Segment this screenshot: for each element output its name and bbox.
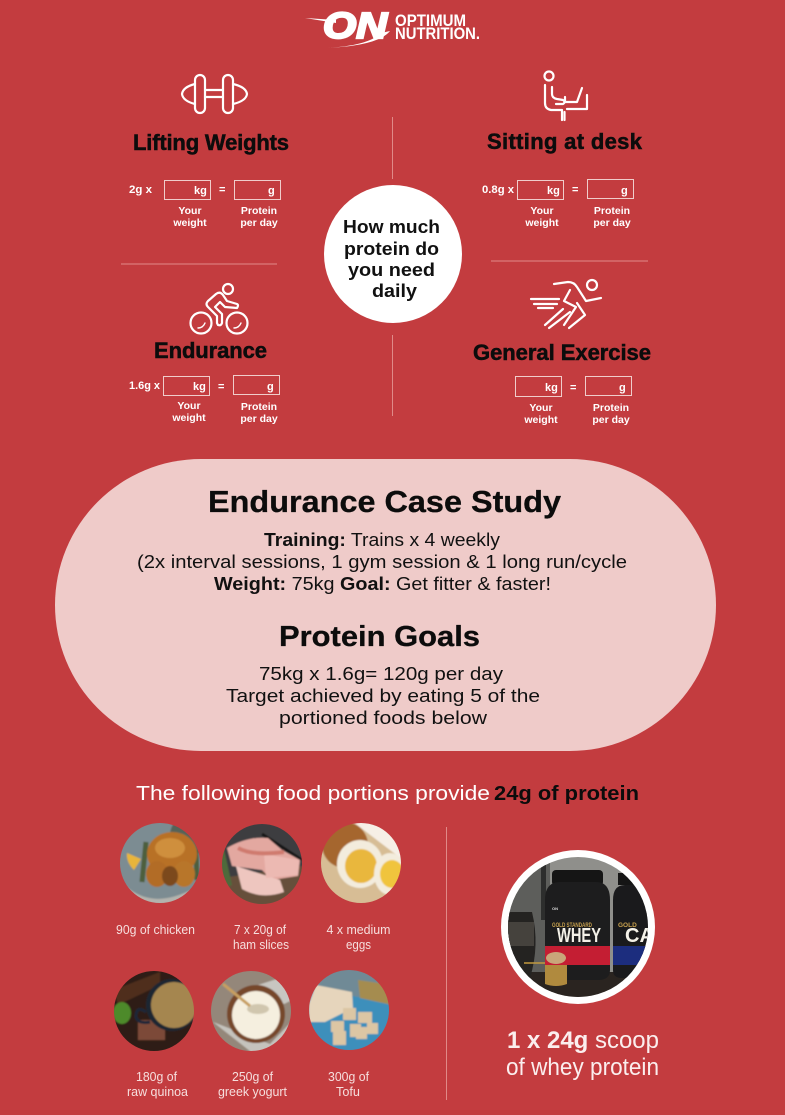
food portions heading	[136, 783, 639, 805]
icon: dumbbell	[182, 75, 247, 113]
food labels: greek yogurt	[218, 1085, 288, 1099]
icon: cyclist	[190, 284, 248, 334]
icon: runner	[531, 280, 601, 328]
protein goals details	[226, 664, 540, 728]
formula: lifting weights: kg	[194, 185, 207, 197]
center circle: how much protein: protein do	[344, 239, 439, 259]
formula: general exercise: per day	[592, 414, 630, 426]
formula: general exercise	[516, 376, 632, 426]
panel: endurance case study	[55, 459, 716, 751]
formula: endurance: Protein	[241, 401, 277, 413]
formula: sitting at desk: g	[621, 185, 628, 197]
protein scoop	[524, 952, 567, 986]
formula: general exercise: weight	[523, 414, 558, 426]
formula: sitting at desk: kg	[547, 185, 560, 197]
formula: sitting at desk: per day	[593, 217, 631, 229]
food labels: raw quinoa	[127, 1085, 188, 1099]
formula: general exercise: g	[619, 382, 626, 394]
formula: endurance: kg	[193, 381, 206, 393]
center circle: how much protein: daily	[372, 281, 417, 301]
heading: protein goals: Protein Goals	[279, 621, 480, 653]
whey tub: WHEY	[557, 925, 601, 947]
formula: endurance: per day	[240, 413, 278, 425]
formula: sitting at desk: 0.8g x	[482, 184, 515, 196]
formula: sitting at desk: weight	[524, 217, 559, 229]
center circle: how much protein	[324, 185, 462, 323]
case study details	[137, 530, 627, 594]
food: eggs	[321, 823, 401, 903]
logo: Optimum Nutrition	[305, 5, 480, 48]
formula: general exercise: =	[570, 382, 576, 394]
food labels: 180g of	[136, 1070, 178, 1084]
formula: lifting weights: Protein	[241, 205, 277, 217]
casein tub	[613, 873, 648, 978]
formula: endurance: weight	[171, 412, 206, 424]
whey protein product photo	[501, 850, 667, 1004]
formula: general exercise: kg	[545, 382, 558, 394]
food portions heading: 24g of protein	[494, 783, 639, 805]
formula: lifting weights: weight	[172, 217, 207, 229]
weight plates	[508, 912, 536, 978]
panel: endurance	[129, 284, 280, 425]
formula: general exercise: Your	[529, 402, 553, 414]
panel: general exercise	[473, 280, 651, 426]
formula: lifting weights: g	[268, 185, 275, 197]
formula: sitting at desk: =	[572, 184, 578, 196]
whey tub: ON	[552, 906, 558, 911]
food: chicken	[120, 823, 200, 903]
heading: lifting weights: Lifting Weights	[133, 130, 289, 155]
heading: endurance case study: Endurance Case Study	[208, 484, 562, 519]
formula: endurance: =	[218, 381, 224, 393]
food: tofu	[309, 970, 389, 1050]
panel: sitting at desk	[482, 72, 643, 229]
formula: endurance: 1.6g x	[129, 380, 161, 392]
whey tub	[545, 870, 610, 980]
logo: Optimum Nutrition: ON	[323, 5, 388, 46]
food labels: 4 x medium	[326, 923, 390, 937]
formula: lifting weights: 2g x	[129, 184, 153, 196]
logo: Optimum Nutrition: NUTRITION.	[395, 25, 480, 43]
food labels: Tofu	[336, 1085, 360, 1099]
heading: sitting at desk: Sitting at desk	[487, 129, 643, 154]
formula: lifting weights: per day	[240, 217, 278, 229]
center circle: how much protein: How much	[343, 217, 440, 237]
food labels: eggs	[346, 938, 371, 952]
whey protein caption	[506, 1027, 659, 1081]
food labels: 7 x 20g of	[234, 923, 286, 937]
food: greek yogurt	[211, 971, 291, 1051]
food: ham slices	[220, 822, 304, 906]
case study details: (2x interval sessions, 1 gym session & 1 long run/cycle	[137, 552, 627, 572]
formula: lifting weights: =	[219, 184, 225, 196]
protein goals details: Target achieved by eating 5 of the	[226, 686, 540, 706]
formula: lifting weights	[129, 180, 280, 229]
icon: person at desk	[544, 72, 587, 120]
food labels: 250g of	[232, 1070, 274, 1084]
food labels	[116, 923, 390, 1099]
whey protein caption: of whey protein	[506, 1054, 659, 1081]
formula: lifting weights: Your	[178, 205, 202, 217]
protein goals details: portioned foods below	[279, 708, 488, 728]
panel: lifting weights	[129, 75, 289, 229]
casein tub: GOLD	[618, 922, 637, 929]
formula: sitting at desk	[482, 180, 634, 229]
casein tub: CAS	[625, 925, 667, 947]
formula: general exercise: Protein	[593, 402, 629, 414]
formula: sitting at desk: Protein	[594, 205, 630, 217]
center circle: how much protein: you need	[348, 260, 435, 280]
food labels: 300g of	[328, 1070, 370, 1084]
heading: general exercise: General Exercise	[473, 340, 651, 365]
whey tub: GOLD STANDARD	[552, 922, 592, 929]
formula: sitting at desk: Your	[530, 205, 554, 217]
case study details: Weight: 75kg Goal: Get fitter & faster!	[214, 574, 551, 594]
logo: Optimum Nutrition: OPTIMUM	[395, 11, 466, 30]
food labels: 90g of chicken	[116, 923, 195, 937]
protein goals details: 75kg x 1.6g= 120g per day	[259, 664, 503, 684]
food labels: ham slices	[233, 938, 289, 952]
formula: endurance: g	[267, 381, 274, 393]
formula: endurance: Your	[177, 400, 201, 412]
case study details: Training: Trains x 4 weekly	[264, 530, 500, 550]
food: raw quinoa	[114, 971, 194, 1051]
food portions heading: The following food portions provide	[136, 783, 490, 805]
whey protein caption: 1 x 24g scoop	[507, 1027, 659, 1054]
heading: endurance: Endurance	[154, 338, 267, 363]
formula: endurance	[129, 376, 280, 425]
